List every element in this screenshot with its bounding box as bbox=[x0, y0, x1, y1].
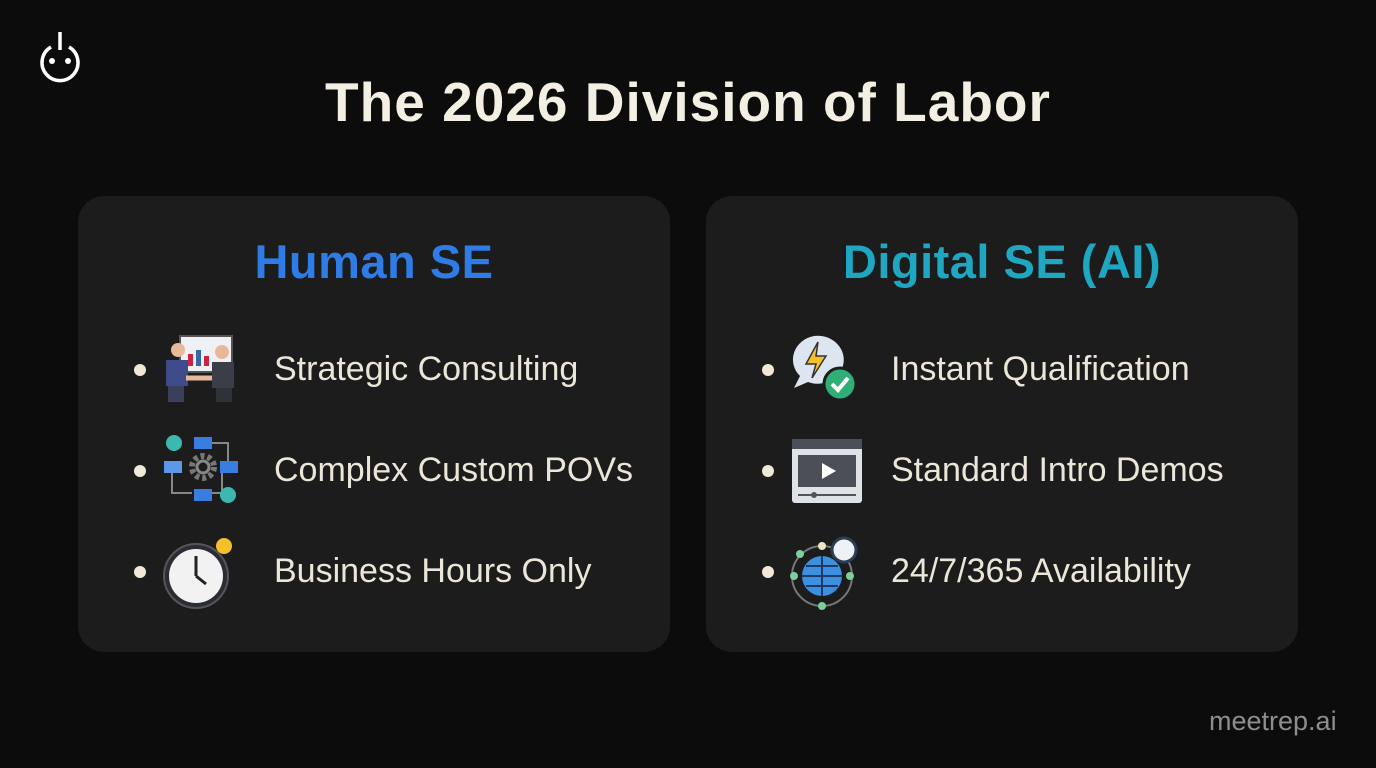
item: instant qualification: Instant Qualification bbox=[891, 350, 1190, 388]
item: strategic consulting bbox=[134, 335, 578, 402]
item: instant qualification bbox=[762, 336, 1190, 398]
item: 24/7/365 availability: 24/7/365 Availability bbox=[891, 552, 1191, 590]
item: complex custom POVs bbox=[134, 435, 633, 503]
item: business hours only bbox=[134, 538, 592, 609]
icon: lightning chat check bbox=[792, 336, 854, 398]
item: strategic consulting: Strategic Consulting bbox=[274, 350, 578, 388]
icon: workflow gear bbox=[164, 435, 238, 503]
icon: clock with sun bbox=[163, 538, 232, 609]
title: The 2026 Division of Labor bbox=[325, 71, 1051, 133]
icon: handshake presentation bbox=[166, 335, 234, 402]
panel: Human SE bbox=[78, 196, 670, 652]
footer brand: meetrep.ai bbox=[1209, 706, 1337, 736]
heading: Human SE: Human SE bbox=[254, 235, 494, 288]
item: complex custom POVs: Complex Custom POVs bbox=[274, 451, 633, 489]
item: business hours only: Business Hours Only bbox=[274, 552, 591, 590]
icon: video player bbox=[792, 439, 862, 503]
heading: Digital SE (AI): Digital SE (AI) bbox=[843, 235, 1161, 288]
logo icon bbox=[40, 32, 80, 82]
item: 24/7/365 availability bbox=[762, 536, 1191, 610]
icon: globe network clock bbox=[790, 536, 858, 610]
panel: Digital SE bbox=[706, 196, 1298, 652]
item: standard intro demos: Standard Intro Demos bbox=[891, 451, 1224, 489]
item: standard intro demos bbox=[762, 439, 1224, 503]
